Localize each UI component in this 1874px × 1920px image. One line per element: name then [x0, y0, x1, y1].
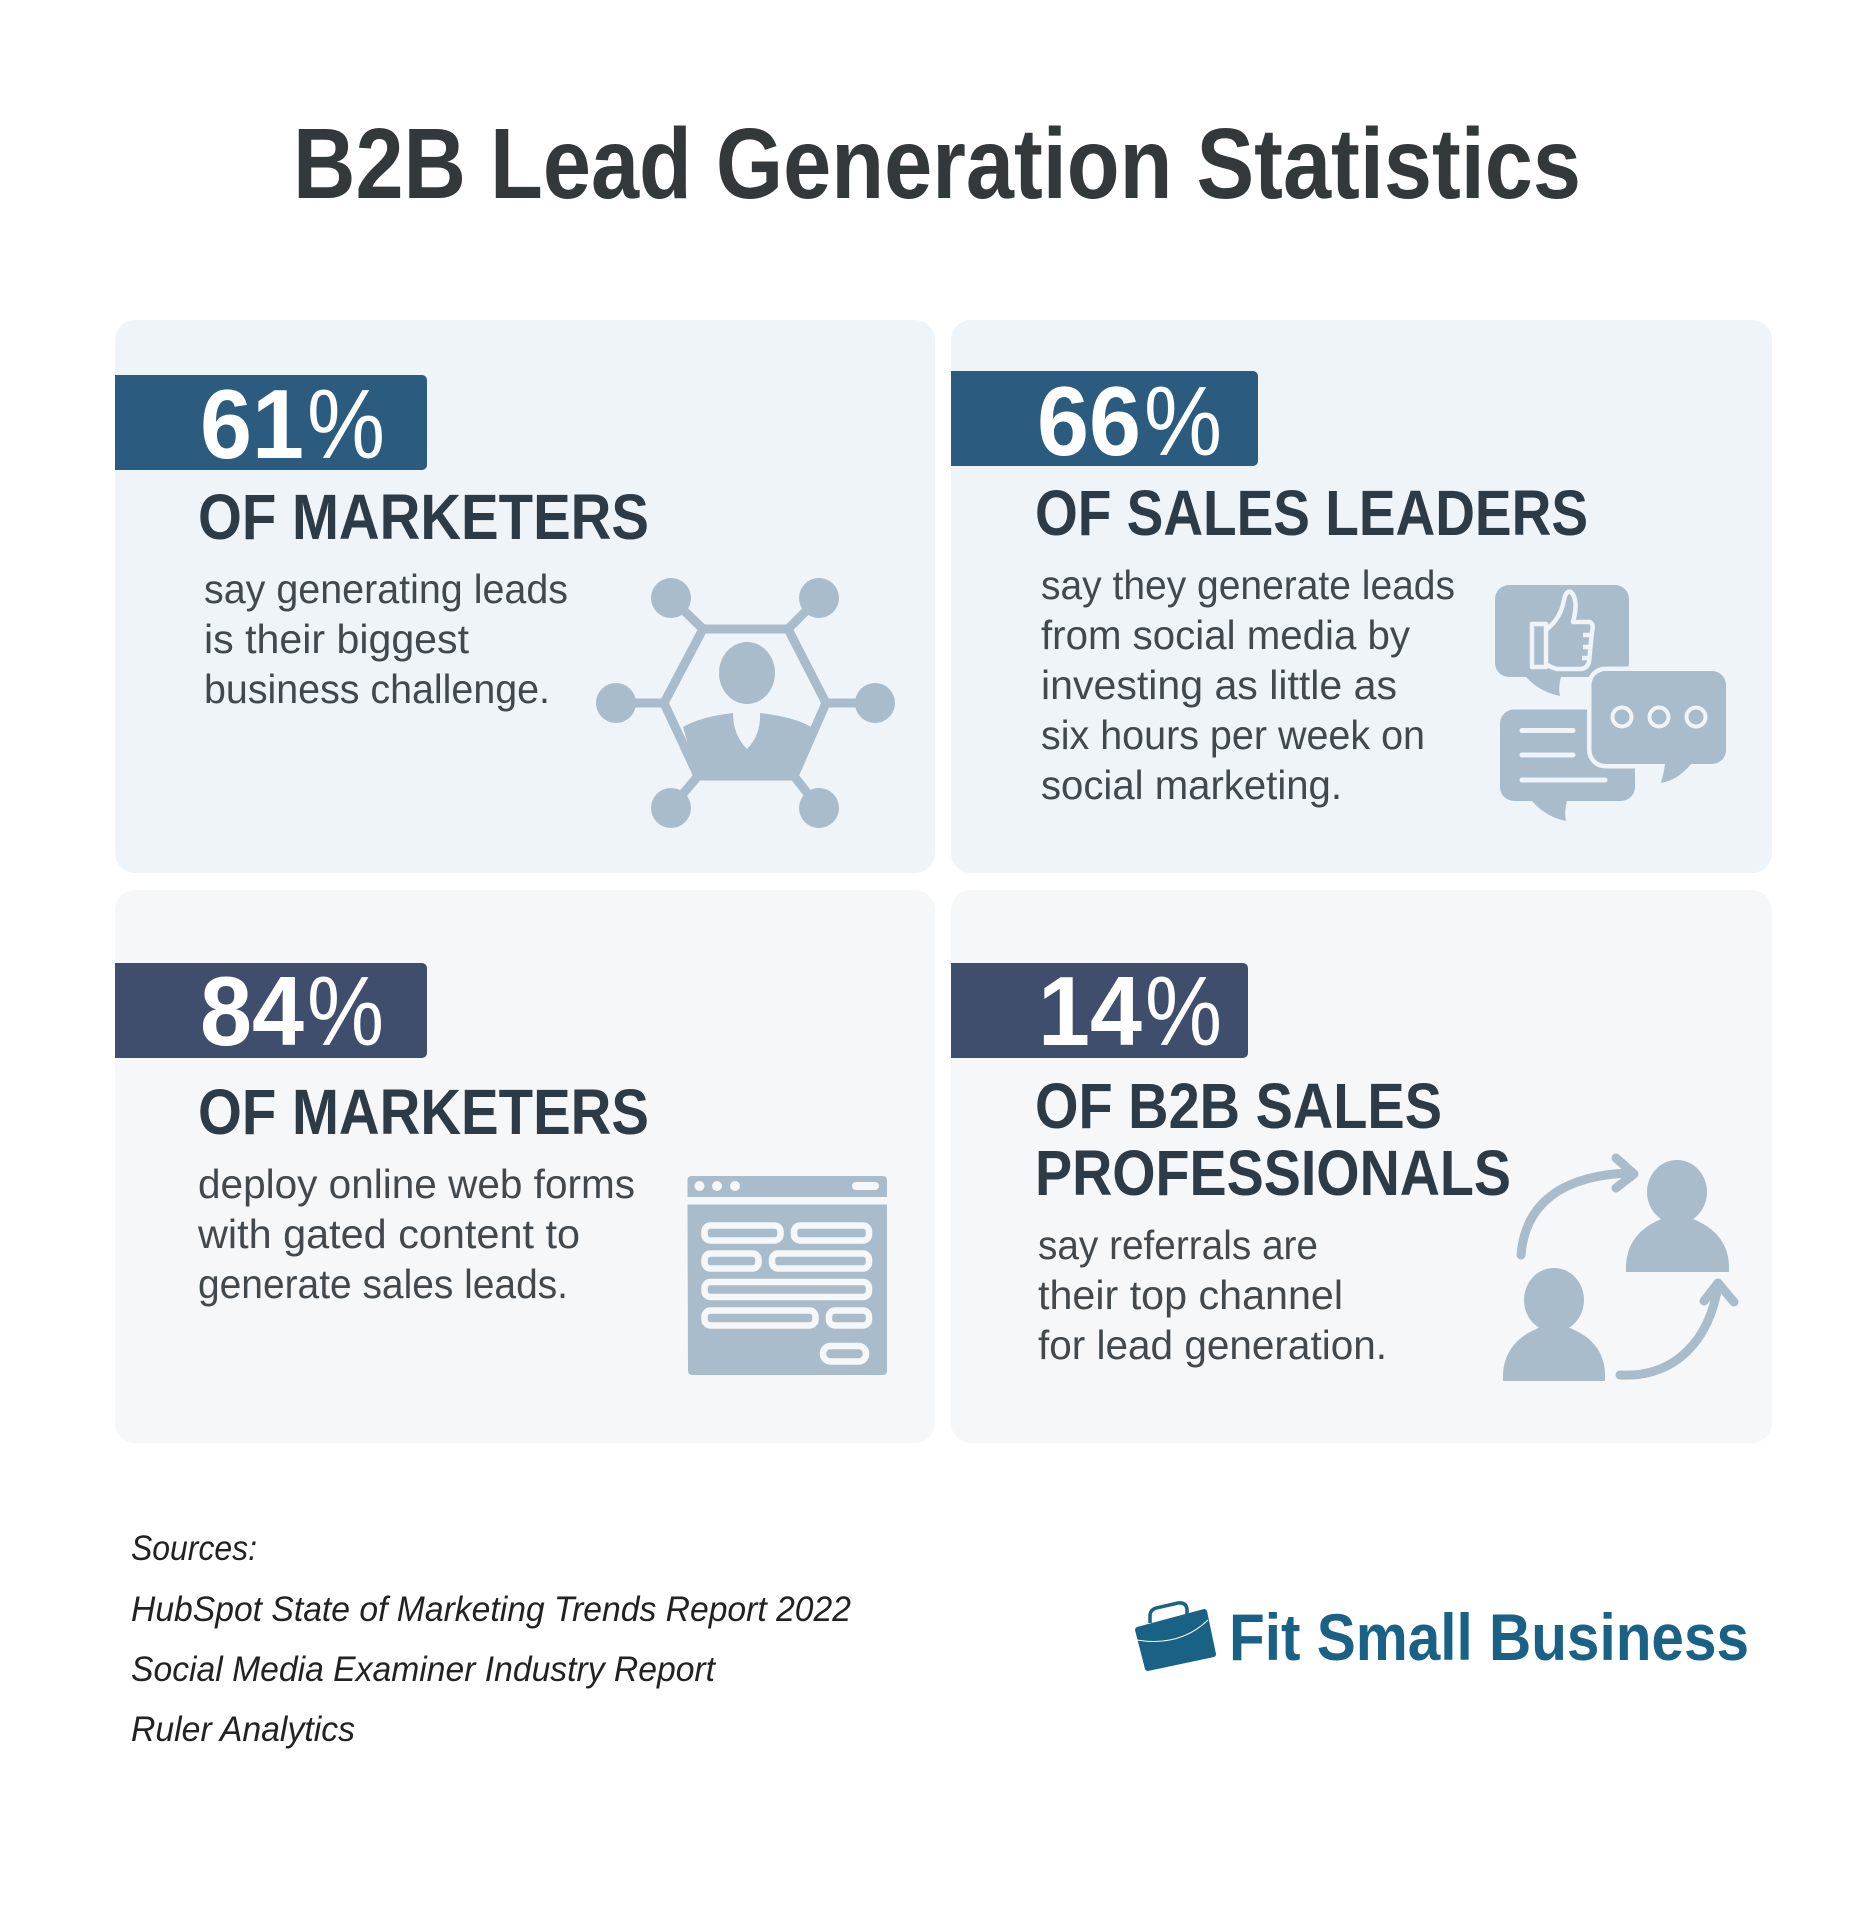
body text: generate sales leads. [198, 1261, 568, 1307]
panel: 61% of marketers [115, 320, 935, 873]
logo: Fit Small Business [1135, 1600, 1749, 1674]
badge: 66%: 66 [1037, 366, 1141, 476]
sources: Social Media Examiner Industry Report [131, 1650, 716, 1689]
panel: 14% of B2B sales professionals [951, 890, 1772, 1443]
body text: say they generate leads [1041, 562, 1455, 608]
heading [1035, 1070, 1511, 1209]
body text: business challenge. [204, 666, 550, 712]
badge: 66%: % [1144, 366, 1222, 476]
icon: person network [596, 578, 895, 828]
wordmark: Fit Small Business [1229, 1600, 1749, 1674]
badge: 84%: % [307, 956, 384, 1066]
body text: six hours per week on [1041, 712, 1425, 758]
body text: say generating leads [204, 566, 568, 612]
bubble with dots [1592, 671, 1726, 783]
body text: with gated content to [197, 1211, 580, 1257]
body text: is their biggest [204, 616, 470, 662]
heading: OF B2B SALES [1035, 1070, 1442, 1142]
badge: 66% [951, 366, 1258, 476]
heading: OF MARKETERS [198, 481, 649, 553]
heading: OF SALES LEADERS [1035, 477, 1588, 549]
sources [131, 1529, 851, 1749]
sources: Sources: [131, 1529, 257, 1568]
body text: investing as little as [1041, 662, 1397, 708]
title: B2B Lead Generation Statistics [293, 108, 1581, 220]
badge: 61% [115, 369, 427, 479]
icon: speech bubbles [1495, 585, 1726, 821]
body text: deploy online web forms [198, 1161, 635, 1207]
badge: 61%: % [307, 369, 385, 479]
body text [197, 1161, 635, 1307]
badge: 84%: 84 [200, 956, 304, 1066]
bubble with thumbs up [1495, 585, 1629, 696]
icon: briefcase [1135, 1603, 1216, 1671]
heading: OF MARKETERS [198, 1076, 649, 1148]
body text: social marketing. [1041, 762, 1342, 808]
heading: PROFESSIONALS [1035, 1137, 1511, 1209]
body text: their top channel [1038, 1272, 1343, 1318]
badge: 14% [951, 956, 1248, 1066]
body text: for lead generation. [1038, 1322, 1387, 1368]
body text [1041, 562, 1455, 808]
badge: 14%: % [1145, 956, 1222, 1066]
body text: from social media by [1041, 612, 1410, 658]
panel: 84% of marketers [115, 890, 935, 1443]
badge: 61%: 61 [200, 369, 304, 479]
sources: Ruler Analytics [131, 1710, 355, 1749]
icon: referral people and arrows [1503, 1158, 1734, 1381]
panel: 66% of sales leaders [951, 320, 1772, 873]
badge: 14%: 14 [1038, 956, 1142, 1066]
badge: 84% [115, 956, 427, 1066]
body text [1038, 1222, 1387, 1368]
body text [204, 566, 568, 712]
icon: web form [688, 1176, 887, 1375]
sources: HubSpot State of Marketing Trends Report 2022 [131, 1590, 851, 1629]
bubble with text lines [1500, 710, 1635, 821]
body text: say referrals are [1038, 1222, 1318, 1268]
